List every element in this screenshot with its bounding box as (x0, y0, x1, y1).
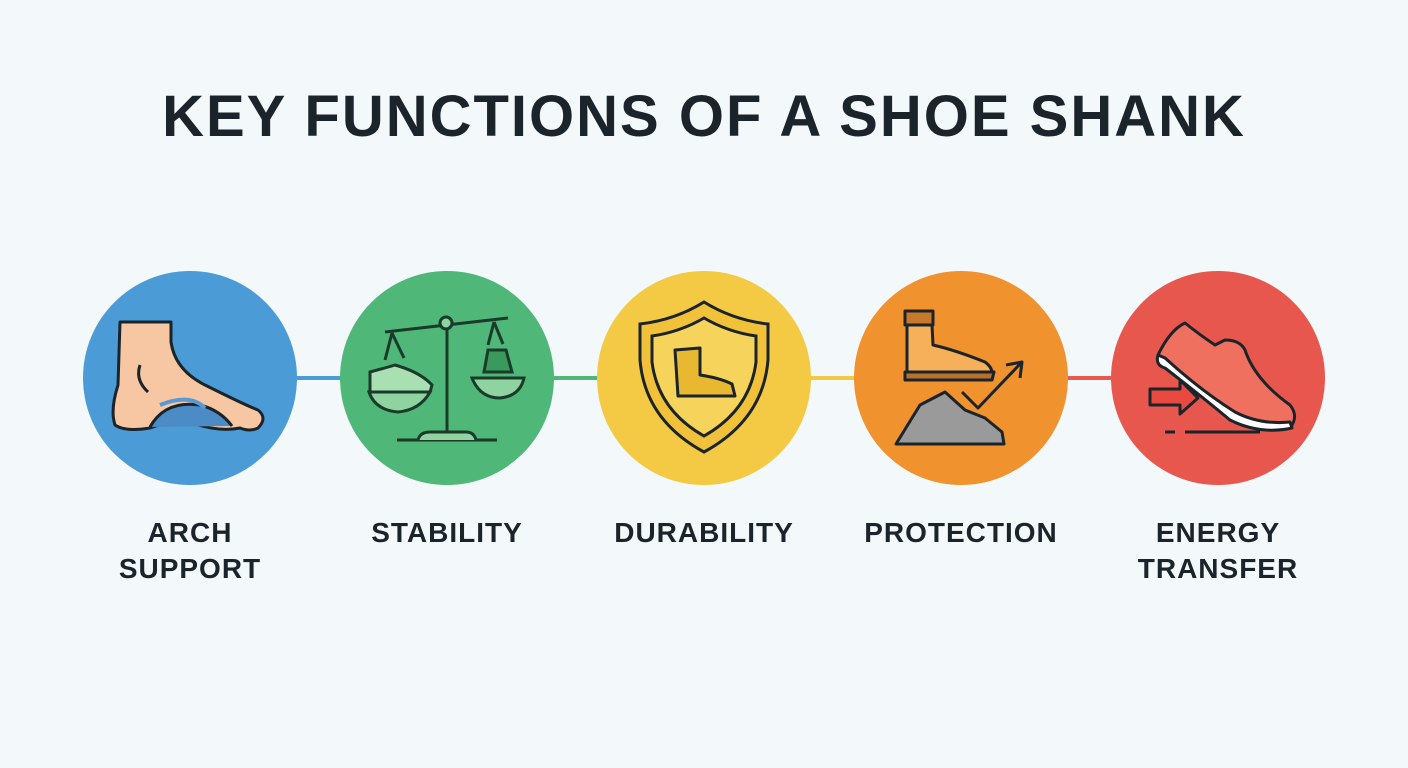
icon: durability shield (597, 271, 811, 485)
label: protection: PROTECTION (864, 517, 1058, 548)
icon: energy transfer sneaker (1111, 271, 1325, 485)
label: arch support: ARCH (148, 517, 232, 548)
icon: stability scale (340, 271, 554, 485)
connector lines (297, 376, 1111, 380)
icon: protection boot and rocks (854, 271, 1068, 485)
label: durability: DURABILITY (614, 517, 794, 548)
label: energy transfer (1138, 517, 1298, 584)
label: energy transfer: TRANSFER (1138, 553, 1298, 584)
label: energy transfer: ENERGY (1156, 517, 1280, 548)
label: arch support (119, 517, 261, 584)
label: stability: STABILITY (371, 517, 523, 548)
label: arch support: SUPPORT (119, 553, 261, 584)
icon: arch support (83, 271, 297, 485)
title: KEY FUNCTIONS OF A SHOE SHANK (162, 84, 1246, 149)
